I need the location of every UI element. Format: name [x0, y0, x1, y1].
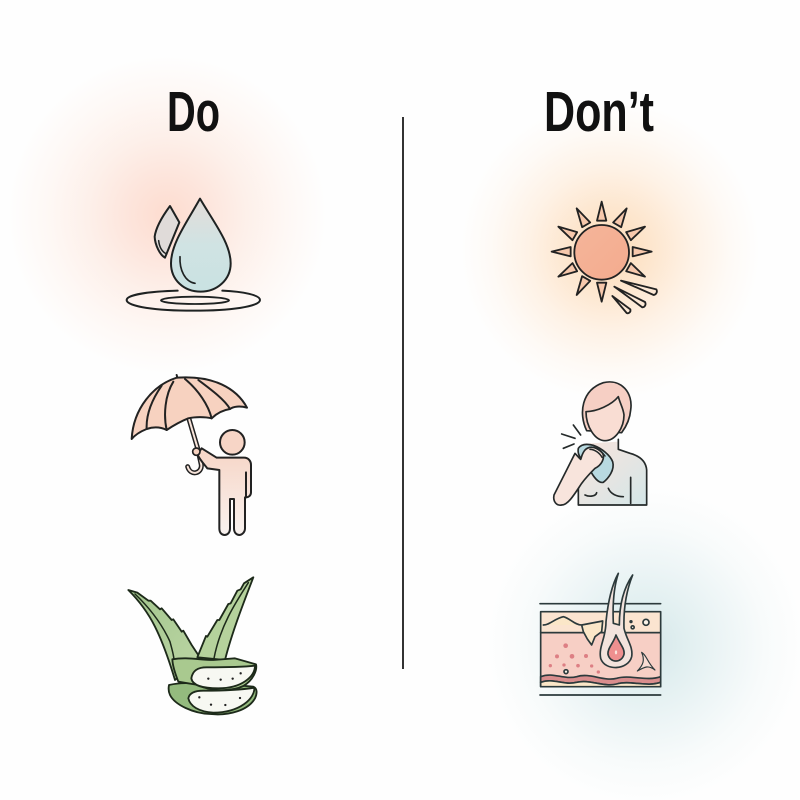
small drop: [155, 206, 179, 258]
top skin layer: [541, 612, 661, 633]
dermis layer: [541, 633, 661, 687]
icon: woman rubbing skin with cloth: [554, 382, 647, 505]
icon: water drops: [127, 199, 260, 311]
arm: [554, 447, 603, 505]
pigment dots: [549, 643, 600, 674]
person hand: [193, 448, 200, 455]
follicle bulb: [608, 635, 624, 661]
icon: skin cross-section: [540, 573, 661, 695]
nerve curve: [637, 652, 655, 671]
hair: [582, 382, 631, 433]
person body: [197, 448, 251, 535]
pores: [564, 619, 649, 674]
hair follicle: [600, 573, 633, 668]
large drop: [171, 199, 231, 292]
umbrella handle: [188, 419, 201, 473]
chest lines: [585, 477, 631, 503]
heading: Don't: Don’t: [544, 80, 654, 144]
ripples: [127, 291, 260, 311]
heading: Do: Do: [167, 80, 220, 144]
lower wavy band: [541, 675, 661, 685]
skin damage flap: [543, 617, 603, 645]
lower aloe slice: [169, 683, 257, 714]
upper aloe slice: [172, 658, 256, 690]
motion lines: [562, 425, 581, 448]
person head: [220, 430, 245, 455]
torso: [578, 442, 647, 505]
background glow: skin: [485, 485, 800, 800]
cloth: [578, 444, 613, 482]
umbrella canopy: [132, 377, 247, 439]
icon: person with umbrella: [132, 375, 251, 535]
sun streaks: [612, 281, 657, 313]
face: [586, 397, 624, 441]
left leaf: [128, 590, 200, 680]
sun disc: [574, 225, 629, 280]
background glow: sun: [460, 100, 760, 400]
icon: aloe vera: [128, 577, 257, 714]
background glow: water: [7, 55, 327, 375]
center divider: [402, 117, 404, 669]
sun rays: [552, 202, 652, 302]
right leaf: [197, 577, 253, 660]
icon: sun: [552, 202, 657, 313]
outer skin lines: [540, 604, 661, 695]
aloe seeds: [198, 672, 242, 706]
